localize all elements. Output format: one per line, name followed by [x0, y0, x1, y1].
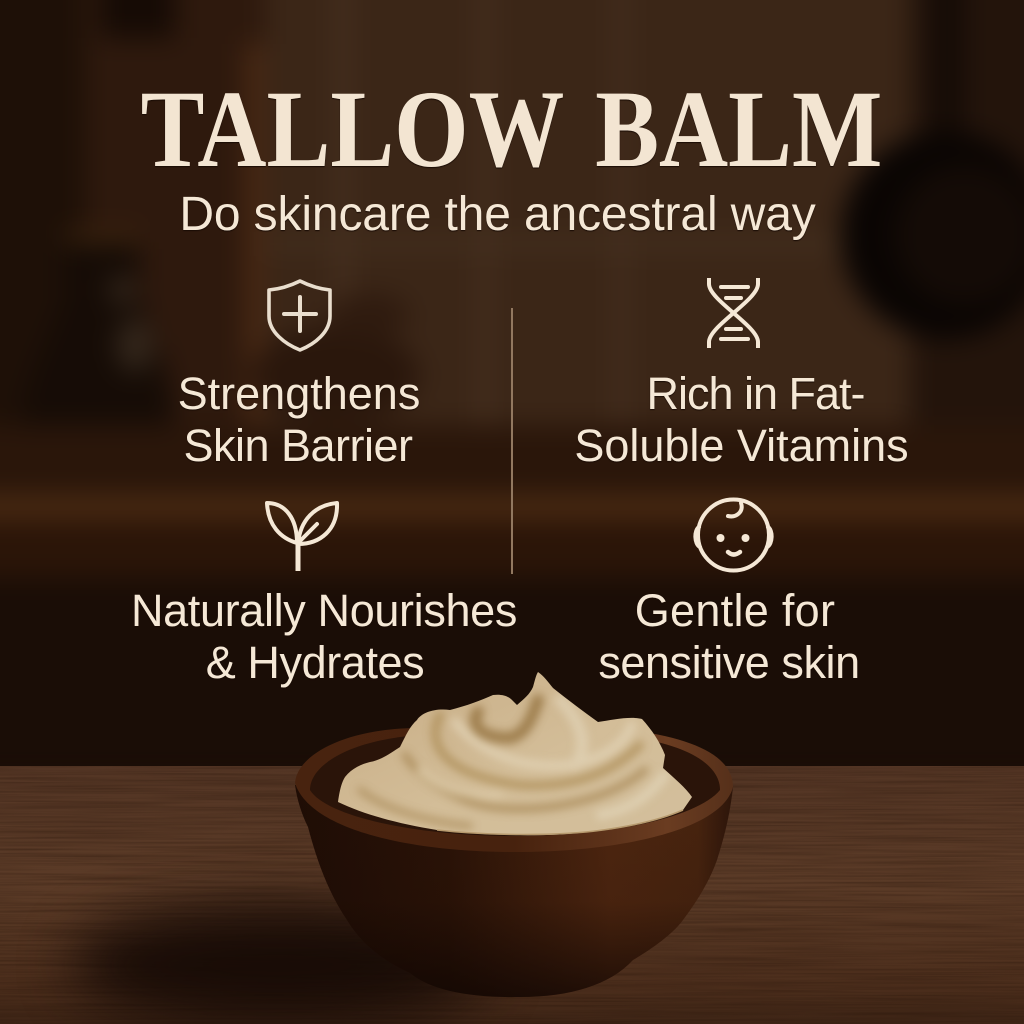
- benefit: rich in fat-soluble vitamins: Soluble Vitamins: [574, 420, 909, 471]
- benefit: rich in fat-soluble vitamins: [574, 278, 909, 471]
- label: Naturally Nourishes: [131, 585, 517, 636]
- balm swirl: [338, 672, 692, 835]
- subtitle: Do skincare the ancestral way: [179, 188, 816, 241]
- icon: shield with plus: [267, 279, 332, 352]
- wooden table: [0, 766, 1024, 1024]
- title: TALLOW BALM: [141, 68, 882, 190]
- benefit: gentle for sensitive skin: sensitive skin: [598, 637, 860, 688]
- bowl rim and interior: [295, 728, 733, 852]
- blurred kitchen backdrop: [0, 0, 1024, 777]
- label: Rich in Fat-: [646, 368, 865, 419]
- label: Strengthens: [178, 368, 420, 419]
- label: Gentle for: [635, 585, 835, 636]
- icon: leaf sprout: [265, 501, 340, 571]
- icon: baby face: [693, 498, 774, 572]
- benefit: strengthens skin barrier: Skin Barrier: [183, 420, 413, 471]
- shadow under bowl: [70, 903, 490, 1024]
- benefit: gentle for sensitive skin: [598, 498, 860, 688]
- benefit: strengthens skin barrier: [178, 279, 420, 471]
- icon: DNA helix: [707, 278, 760, 348]
- benefit: naturally nourishes and hydrates: & Hydrates: [206, 637, 424, 688]
- benefit: naturally nourishes and hydrates: [131, 501, 517, 688]
- bowl: [295, 672, 733, 997]
- vertical divider: [511, 308, 513, 574]
